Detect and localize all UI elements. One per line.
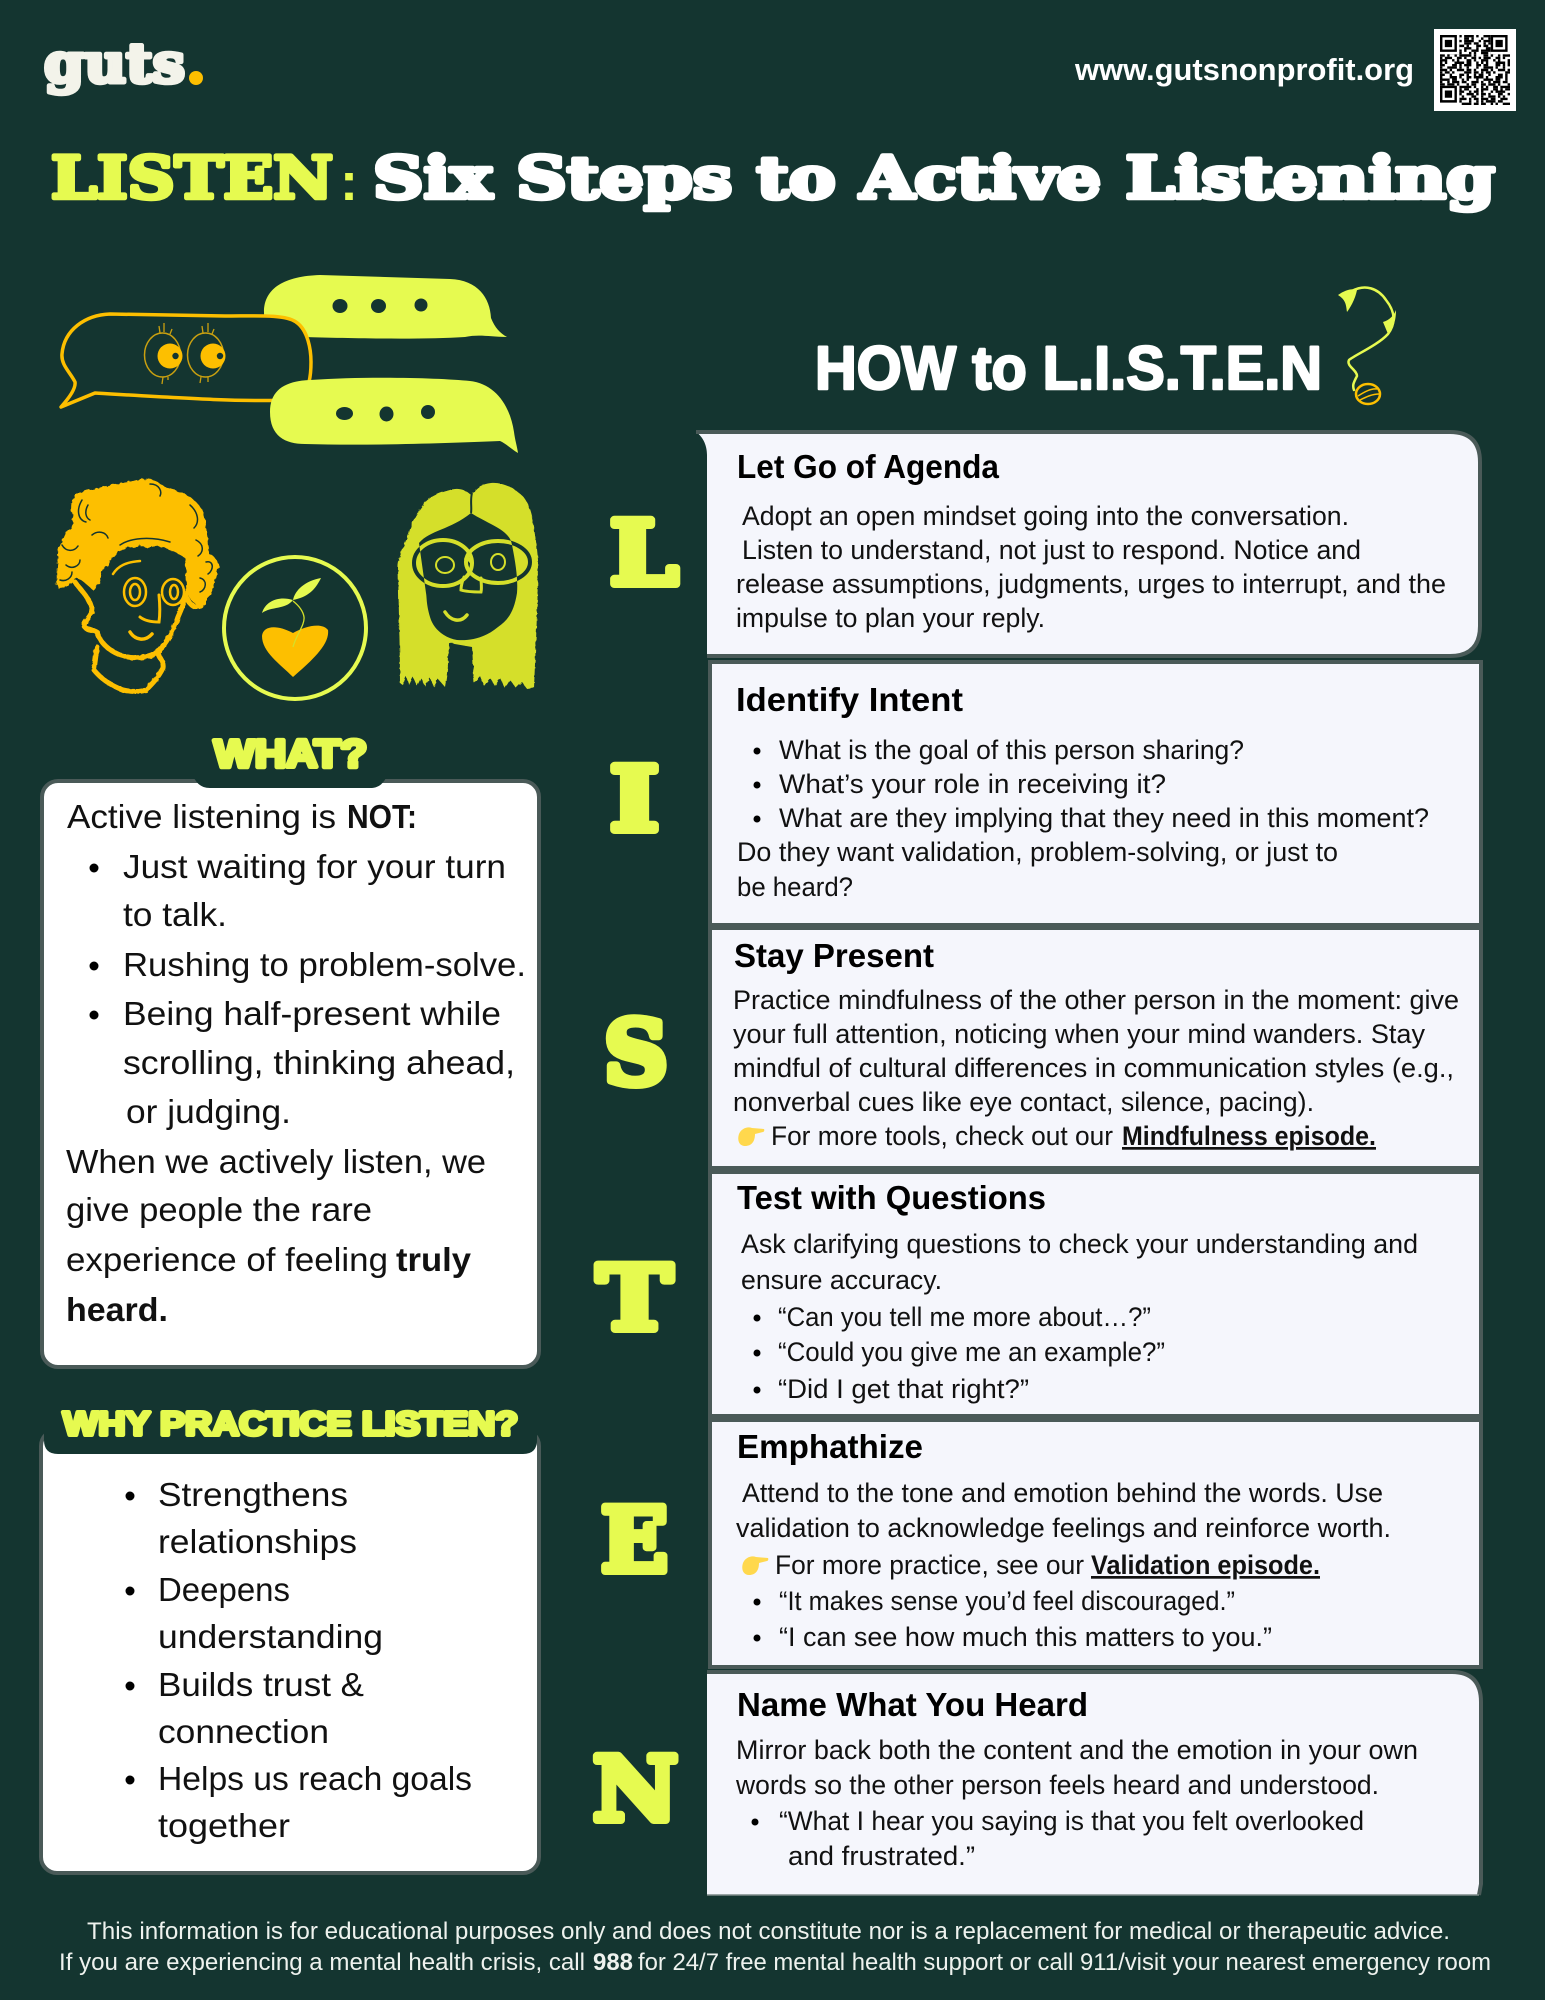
footer disclaimer <box>59 1918 1491 1976</box>
illustration: speech bubbles <box>61 275 518 453</box>
letter L: L <box>610 501 678 605</box>
list: reasons to practice: Strengthens <box>158 1476 348 1513</box>
text: name what you heard body: Mirror back both the content and the emotion in your own <box>736 1735 1418 1765</box>
text: name what you heard body <box>735 1735 1418 1871</box>
text: name what you heard body: and frustrated.” <box>788 1841 975 1871</box>
text: let go body <box>736 501 1446 633</box>
text: test with questions body: Ask clarifying questions to check your understanding and <box>741 1229 1418 1259</box>
text: emphathize body: Attend to the tone and emotion behind the words. Use <box>742 1478 1383 1508</box>
icon: pointing hand <box>738 1127 764 1146</box>
card: T test with questions <box>710 1172 1481 1416</box>
text: stay present body <box>733 985 1459 1151</box>
heading tab: why practice listen: WHY PRACTICE LISTEN? <box>63 1405 518 1442</box>
text: active listening is not: scrolling, thinking ahead, <box>123 1044 515 1081</box>
logo: guts.: guts <box>44 31 185 95</box>
heading: emphathize: Emphathize <box>737 1428 923 1465</box>
letter E: E <box>601 1488 668 1592</box>
icon: bottom yellow bubble <box>270 378 518 453</box>
title: : <box>340 152 358 212</box>
text: stay present body: your full attention, noticing when your mind wanders. Stay <box>733 1019 1425 1049</box>
icon: sprout question mark <box>1338 288 1396 404</box>
text: test with questions body: “Can you tell me more about…?” <box>778 1302 1151 1332</box>
icon: outlined bubble with eyes <box>61 314 311 407</box>
text: stay present body: For more tools, check out our <box>771 1121 1113 1151</box>
footer disclaimer: This information is for educational purposes only and does not constitute nor is a replacement for medical or therapeutic advice. <box>87 1918 1450 1945</box>
list: reasons to practice: Deepens <box>158 1571 290 1608</box>
list: reasons to practice: together <box>158 1807 290 1844</box>
list: reasons to practice: Helps us reach goals <box>158 1760 472 1797</box>
heading tab: why practice listen <box>44 1400 537 1454</box>
footer disclaimer: 988 <box>593 1949 633 1976</box>
text: emphathize body: Validation episode. <box>1091 1550 1320 1580</box>
title: LISTEN <box>51 144 333 212</box>
heading: let go of agenda: Let Go of Agenda <box>737 448 1000 485</box>
card: S stay present <box>710 928 1481 1168</box>
text: stay present body: Practice mindfulness of the other person in the moment: give <box>733 985 1459 1015</box>
panel: why practice listen <box>41 1400 539 1873</box>
text: identify intent body: be heard? <box>737 872 853 902</box>
text: active listening is not: to talk. <box>123 896 227 933</box>
text: active listening is not: Just waiting for your turn <box>123 848 506 885</box>
icon: heart sprout in circle <box>224 557 366 699</box>
text: name what you heard body: words so the other person feels heard and understood. <box>735 1770 1379 1800</box>
text: active listening is not: Being half-present while <box>123 995 501 1032</box>
text: identify intent body: Do they want validation, problem-solving, or just to <box>737 837 1338 867</box>
card: L let go of agenda <box>696 432 1480 657</box>
title: Six Steps to Active Listening <box>373 144 1495 212</box>
footer disclaimer: for 24/7 free mental health support or call 911/visit your nearest emergency room <box>638 1949 1491 1976</box>
list: reasons to practice: connection <box>158 1713 329 1750</box>
text: active listening is not: Active listening is <box>67 798 336 835</box>
text: when we actively listen: experience of feeling <box>66 1241 388 1278</box>
QR code <box>1434 29 1516 111</box>
card: E emphathize <box>710 1420 1481 1667</box>
heading: identify intent: Identify Intent <box>736 681 963 718</box>
card: I identify intent <box>710 662 1481 925</box>
heading tab: what <box>193 733 387 788</box>
text: let go body: Listen to understand, not just to respond. Notice and <box>742 535 1361 565</box>
illustration: person with glasses <box>398 483 538 689</box>
heading: test with questions: Test with Questions <box>737 1179 1046 1216</box>
text: stay present body: Mindfulness episode. <box>1122 1121 1376 1151</box>
text: active listening is not: NOT: <box>347 798 417 835</box>
heading: name what you heard: Name What You Heard <box>737 1686 1088 1723</box>
panel: what <box>42 733 539 1367</box>
text: name what you heard body: “What I hear you saying is that you felt overlooked <box>779 1806 1364 1836</box>
text: identify intent body: What’s your role in receiving it? <box>779 769 1166 799</box>
text: test with questions body: ensure accuracy. <box>741 1265 942 1295</box>
text: emphathize body <box>736 1478 1391 1652</box>
text: test with questions body: “Could you give me an example?” <box>778 1337 1165 1367</box>
text: when we actively listen: heard. <box>66 1291 168 1328</box>
text: when we actively listen: truly <box>396 1241 472 1278</box>
text: emphathize body: For more practice, see our <box>775 1550 1084 1580</box>
text: emphathize body: “It makes sense you’d feel discouraged.” <box>779 1586 1235 1616</box>
letter T: T <box>597 1246 672 1350</box>
letter I: I <box>610 747 659 851</box>
text: active listening is not <box>67 798 526 1130</box>
footer disclaimer: If you are experiencing a mental health crisis, call <box>59 1949 585 1976</box>
list: reasons to practice: Builds trust & <box>158 1666 364 1703</box>
letter S: S <box>604 1001 668 1105</box>
text: when we actively listen <box>66 1143 486 1328</box>
text: identify intent body <box>737 735 1429 902</box>
text: let go body: impulse to plan your reply. <box>736 603 1045 633</box>
list: reasons to practice: understanding <box>158 1618 383 1655</box>
text: test with questions body: “Did I get that right?” <box>778 1374 1029 1404</box>
text: emphathize body: validation to acknowledge feelings and reinforce worth. <box>736 1513 1391 1543</box>
text: active listening is not: Rushing to problem-solve. <box>123 946 526 983</box>
list: reasons to practice <box>126 1476 472 1844</box>
text: let go body: Adopt an open mindset going into the conversation. <box>742 501 1349 531</box>
website url: www.gutsnonprofit.org <box>1074 52 1414 87</box>
icon: top yellow bubble <box>264 275 507 339</box>
icon: pointing hand <box>742 1556 768 1575</box>
list: reasons to practice: relationships <box>158 1523 357 1560</box>
text: when we actively listen: When we actively listen, we <box>66 1143 486 1180</box>
text: when we actively listen: give people the rare <box>66 1191 372 1228</box>
text: identify intent body: What is the goal of this person sharing? <box>779 735 1244 765</box>
text: test with questions body <box>741 1229 1418 1404</box>
text: stay present body: nonverbal cues like eye contact, silence, pacing). <box>733 1087 1314 1117</box>
text: stay present body: mindful of cultural differences in communication styles (e.g., <box>733 1053 1454 1083</box>
text: active listening is not: or judging. <box>126 1093 291 1130</box>
illustration: person with curly hair <box>57 479 218 692</box>
letter N: N <box>593 1737 678 1841</box>
heading tab: what: WHAT? <box>214 733 367 776</box>
text: emphathize body: “I can see how much this matters to you.” <box>779 1622 1272 1652</box>
title <box>51 144 1495 212</box>
heading: stay present: Stay Present <box>734 937 934 974</box>
text: let go body: release assumptions, judgments, urges to interrupt, and the <box>736 569 1446 599</box>
heading: how to listen: HOW to L.I.S.T.E.N <box>815 334 1322 402</box>
text: identify intent body: What are they implying that they need in this moment? <box>779 803 1429 833</box>
card: N name what you heard <box>707 1672 1481 1895</box>
